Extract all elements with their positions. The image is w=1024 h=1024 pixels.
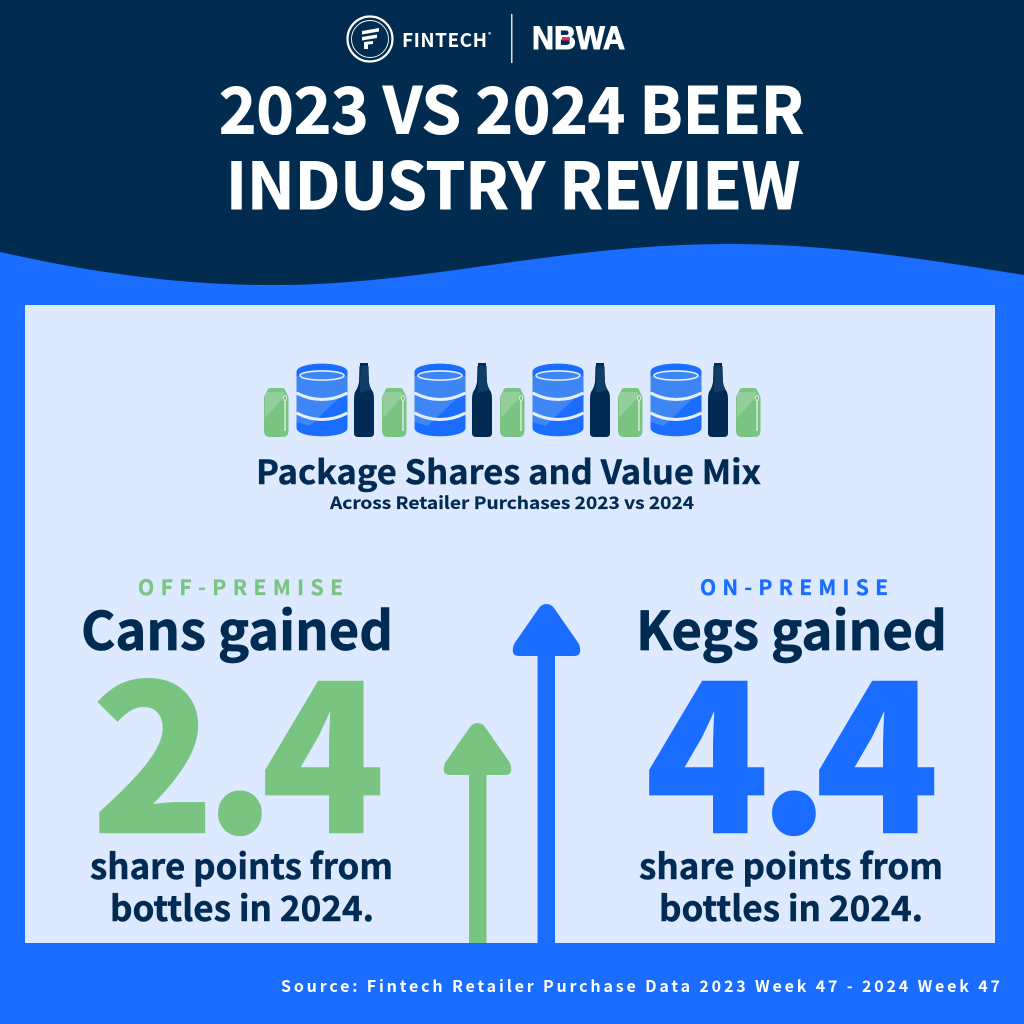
title: 2023 VS 2024 BEER [219, 60, 804, 152]
text: share points: bottles in 2024. [110, 881, 374, 932]
wave: blue background [0, 244, 1024, 1024]
divider [511, 14, 512, 63]
text: share points: share points from [639, 839, 943, 890]
text: share points: share points from [90, 839, 393, 890]
arrow: green [444, 723, 511, 943]
arrow: blue [513, 604, 580, 943]
label: on-premise: ON-PREMISE [700, 572, 888, 602]
text: registered mark: ® [488, 30, 491, 39]
source note: Source: Fintech Retailer Purchase Data 2023 Week 47 - 2024 Week 47 [281, 973, 1000, 997]
title: INDUSTRY REVIEW [226, 136, 800, 228]
text: share points [639, 839, 943, 932]
number: 2.4: 2.4 [91, 596, 385, 892]
logo: Fintech and NBWA [348, 14, 625, 63]
text: NBWA: NBWA [532, 20, 625, 56]
number: 4.4: 4.4 [645, 596, 939, 892]
icon row: cans, kegs and bottles [264, 363, 760, 437]
heading: kegs gained: Kegs gained [636, 590, 947, 666]
panel: off-premise [81, 572, 393, 932]
text: share points: bottles in 2024. [659, 881, 923, 932]
label: off-premise: OFF-PREMISE [138, 572, 343, 602]
text: FINTECH: FINTECH [402, 26, 487, 53]
background: dark header [0, 0, 1024, 300]
text: share points [90, 839, 393, 932]
subheading: Across Retailer Purchases 2023 vs 2024 [329, 489, 694, 514]
heading: cans gained: Cans gained [81, 590, 393, 666]
heading: package shares: Package Shares and Value Mix [256, 446, 761, 494]
icon: NBWA red mark [562, 37, 570, 40]
panel: main content [25, 305, 995, 943]
title [219, 60, 804, 228]
icon: Fintech roundel [348, 16, 392, 62]
panel: on-premise [636, 572, 947, 932]
